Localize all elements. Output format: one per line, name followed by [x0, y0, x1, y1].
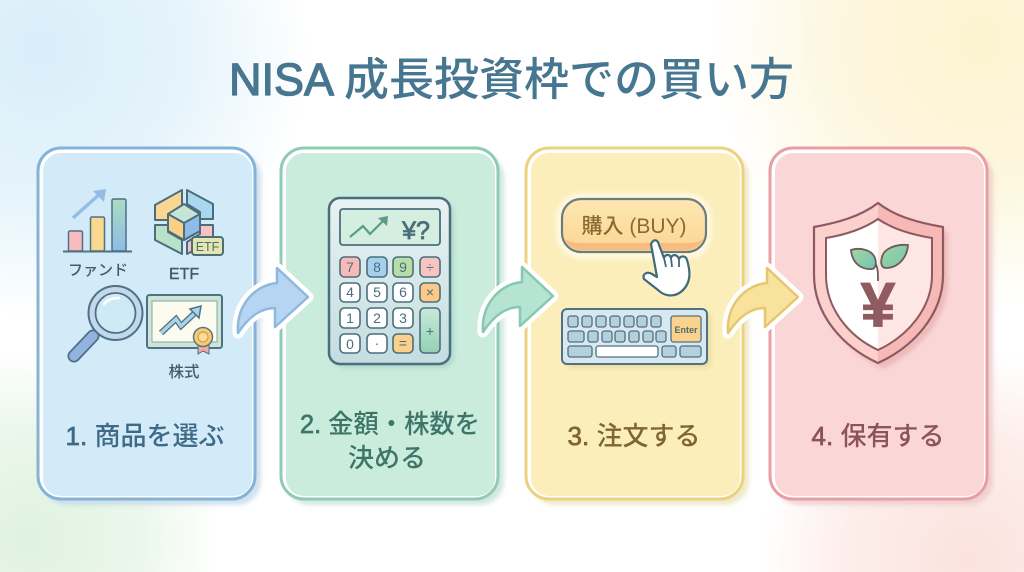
- icon: calculator: ·: [375, 335, 379, 351]
- icon: calculator: 9: [399, 259, 407, 275]
- arrow outline 2: [483, 267, 553, 332]
- icon: calculator: 0: [346, 336, 354, 352]
- icon: calculator: 3: [399, 310, 407, 326]
- icon: calculator: 7: [346, 259, 354, 275]
- label: stocks: 株式: [168, 363, 200, 381]
- icon: pointing hand: [644, 240, 689, 295]
- icon: calculator: 6: [399, 284, 407, 300]
- icon: calculator: +: [426, 323, 434, 339]
- icon: fund bar chart: [63, 189, 132, 252]
- step label 1: 1. 商品を選ぶ: [66, 421, 224, 451]
- icon: stock certificate: [147, 295, 222, 354]
- icon: calculator: ×: [426, 284, 434, 300]
- step label 2 second line: 決める: [348, 443, 426, 473]
- icon: calculator: 1: [346, 310, 354, 326]
- arrow outline 1: [238, 268, 308, 333]
- icon: calculator: 2: [373, 310, 381, 326]
- arrow: step 1 to 2: [238, 268, 308, 333]
- arrow: step 3 to 4: [728, 268, 798, 333]
- icon: ETF cube: [155, 190, 223, 255]
- arrow: step 2 to 3: [483, 267, 553, 332]
- icon: calculator: ¥?: [401, 217, 430, 245]
- panel: step 1 select product: [38, 148, 261, 505]
- icon: calculator: 4: [346, 284, 354, 300]
- icon: magnifier: [74, 286, 142, 356]
- label: fund: ファンド: [68, 262, 128, 279]
- icon: calculator: =: [399, 335, 407, 351]
- step label 4: 4. 保有する: [812, 421, 944, 451]
- icon: calculator: [329, 198, 454, 368]
- label: ETF: ETF: [169, 266, 199, 283]
- step label 3: 3. 注文する: [568, 421, 700, 451]
- icon: calculator: 5: [373, 284, 381, 300]
- yen symbol: ¥: [861, 271, 896, 340]
- panel: step 4 hold: [770, 148, 993, 505]
- icon: buy button: 購入 (BUY): [582, 215, 686, 238]
- icon: calculator: ÷: [426, 259, 434, 275]
- icon: keyboard: [562, 309, 711, 368]
- panel: step 3 place order: [526, 148, 749, 505]
- icon: ETF cube: ETF: [196, 240, 220, 254]
- icon: sprout: [851, 245, 908, 281]
- arrow outline 3: [728, 268, 798, 333]
- icon: shield with yen: [814, 203, 948, 369]
- step label 2: 2. 金額・株数を: [300, 409, 480, 439]
- icon: buy button: [556, 193, 712, 259]
- title: NISA 成長投資枠での買い方: [229, 54, 794, 105]
- panel: step 2 decide amount: [281, 148, 504, 505]
- icon: keyboard: Enter: [674, 325, 698, 335]
- icon: calculator: 8: [373, 259, 381, 275]
